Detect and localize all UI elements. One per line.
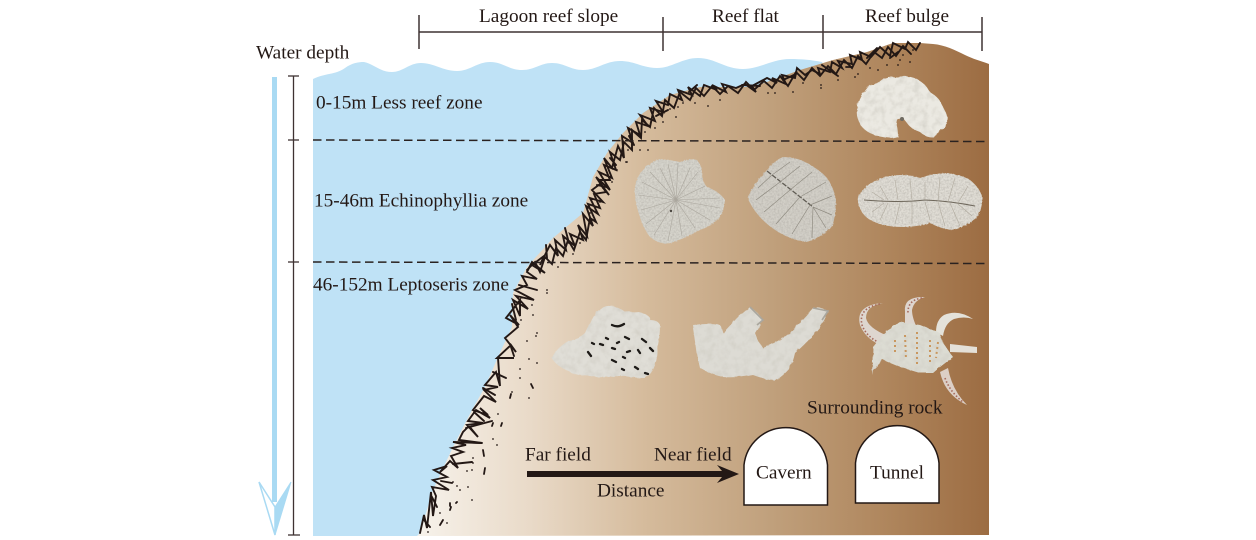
tunnel xyxy=(856,426,939,503)
heading: reef bulge: Reef bulge xyxy=(865,6,949,27)
label: near field: Near field xyxy=(654,444,732,466)
zone label: echinophyllia: 15-46m Echinophyllia zone xyxy=(314,190,528,212)
coral: less reef specimen xyxy=(857,76,947,138)
heading: water depth: Water depth xyxy=(256,42,350,64)
tunnel: Tunnel xyxy=(870,462,924,484)
rock rubble dots xyxy=(428,50,913,532)
label: surrounding rock: Surrounding rock xyxy=(807,398,943,418)
coral: echinophyllia specimen 3 xyxy=(858,173,982,230)
zone divider lines xyxy=(313,140,989,264)
zone bracket: horizontal scale xyxy=(419,15,982,51)
label: far field: Far field xyxy=(525,444,591,466)
zone label: leptoseris: 46-152m Leptoseris zone xyxy=(313,274,509,296)
label: distance: Distance xyxy=(597,480,664,502)
distance arrow xyxy=(527,465,739,483)
zone label: less reef: 0-15m Less reef zone xyxy=(316,92,482,114)
cavern: Cavern xyxy=(756,462,812,484)
reef edge hatching xyxy=(420,42,920,533)
water depth arrow xyxy=(259,77,291,535)
coral: echinophyllia specimen 2 xyxy=(748,157,836,242)
depth scale axis xyxy=(288,76,300,535)
heading: lagoon reef slope: Lagoon reef slope xyxy=(479,6,618,27)
cavern xyxy=(744,428,828,505)
heading: reef flat: Reef flat xyxy=(712,6,780,27)
coral: echinophyllia specimen 1 xyxy=(635,159,725,244)
coral: branching specimen xyxy=(693,307,828,381)
water body xyxy=(313,58,860,536)
coral: perforated leptoseris specimen xyxy=(552,306,660,378)
rock body xyxy=(417,43,989,536)
spider conch shell xyxy=(859,297,977,405)
